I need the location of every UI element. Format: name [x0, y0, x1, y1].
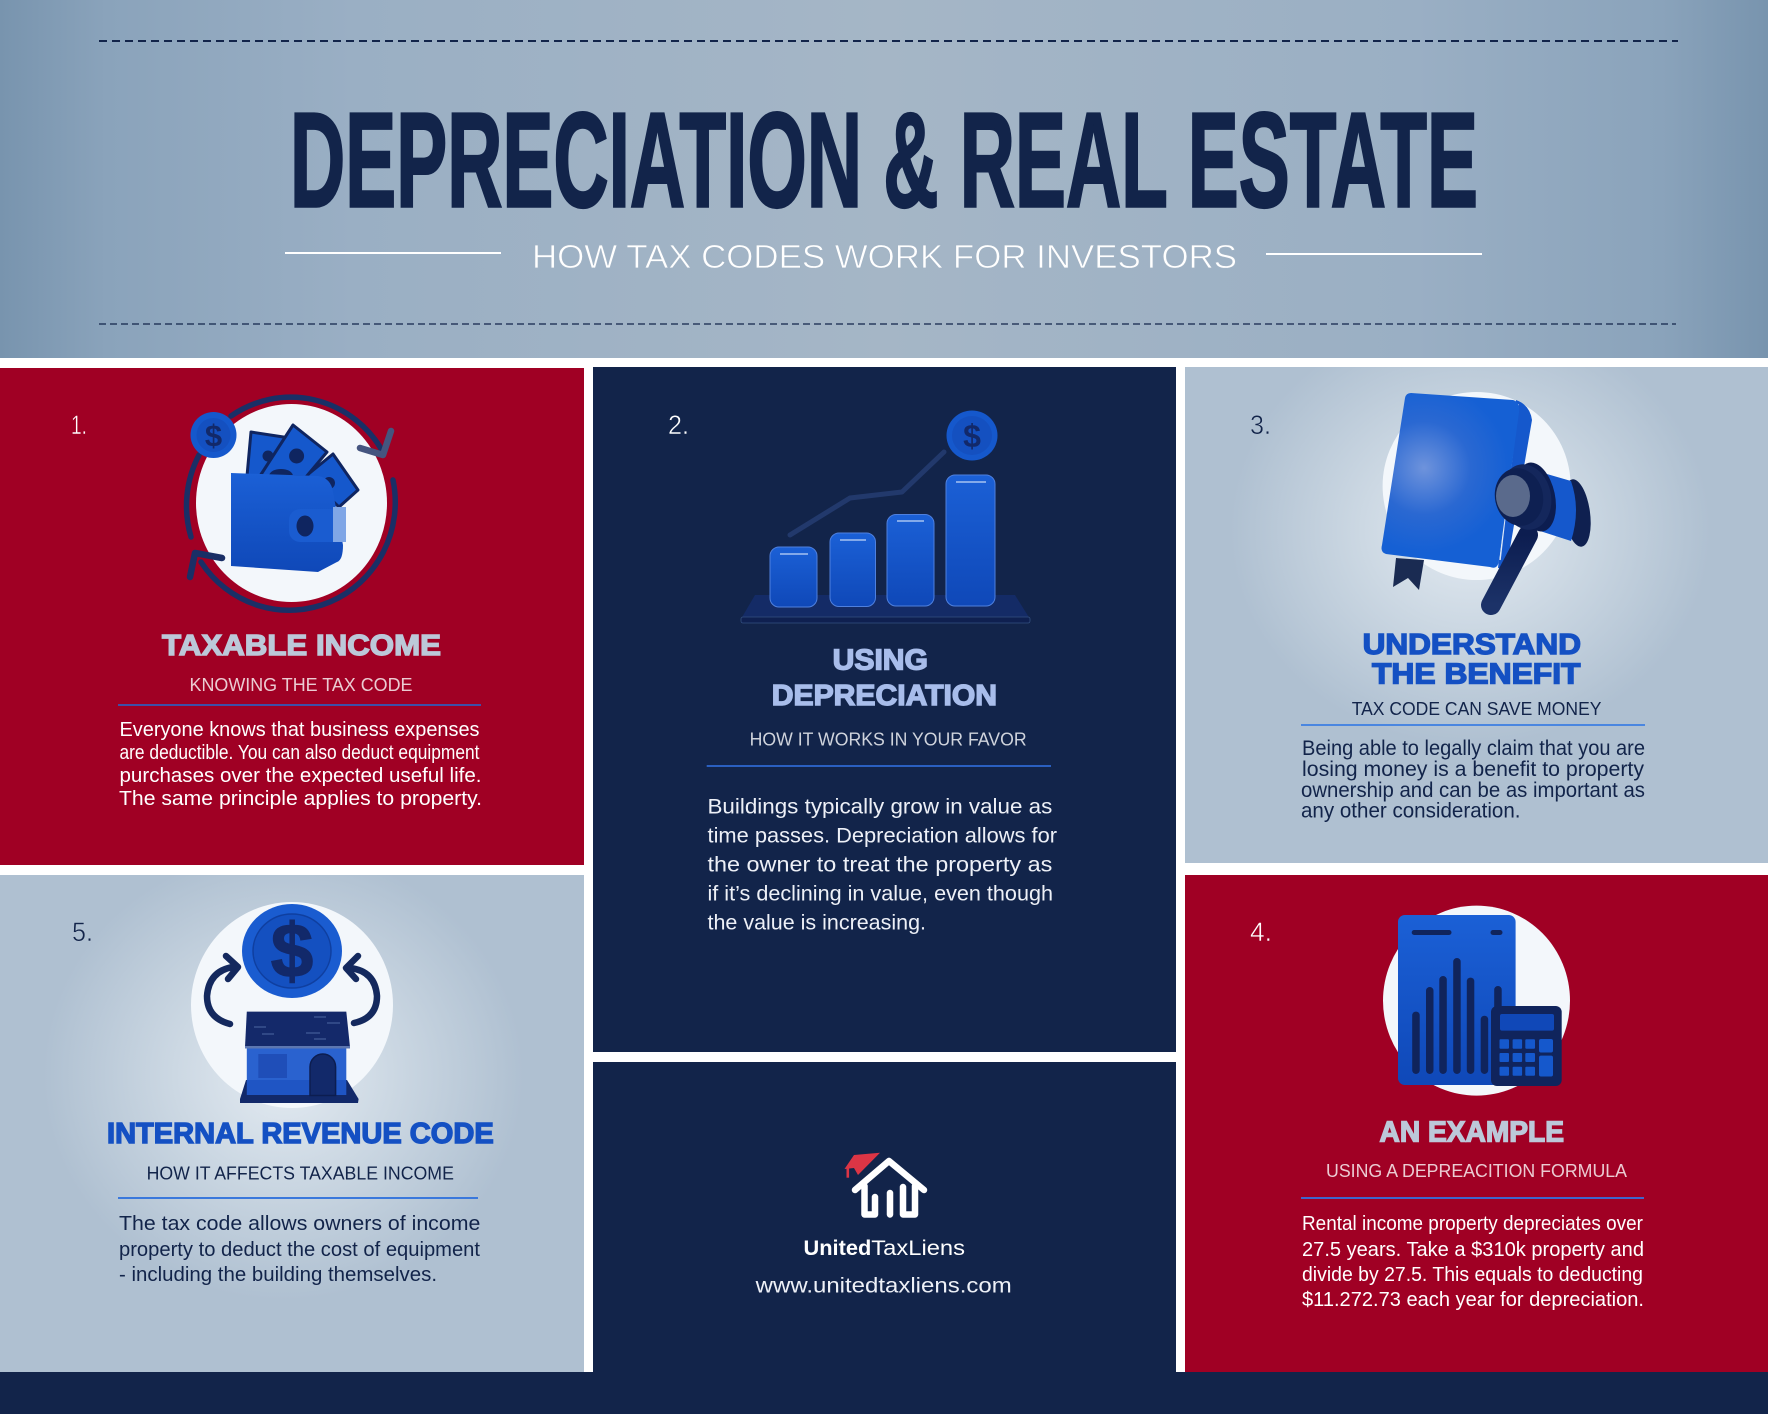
icon: rising bar chart with coin: $: [963, 418, 981, 454]
panel: logo: [593, 1062, 1176, 1372]
body text: if it’s declining in value, even though: [708, 883, 1053, 906]
heading: AN EXAMPLE: [1380, 1117, 1564, 1149]
heading: USING: [833, 644, 928, 676]
brand name: UnitedTaxLiens: [804, 1236, 965, 1260]
body text: property to deduct the cost of equipment: [119, 1238, 480, 1261]
subheading: HOW IT WORKS IN YOUR FAVOR: [750, 728, 1027, 749]
body text: the value is increasing.: [708, 912, 926, 935]
icon: report and calculator: [1383, 906, 1570, 1096]
body text: divide by 27.5. This equals to deducting: [1302, 1263, 1643, 1286]
body text: [708, 796, 1057, 935]
footer bar: [0, 1372, 1768, 1414]
icon: wallet with cash: [187, 397, 395, 610]
panel: 1 taxable income: [0, 368, 584, 865]
website: www.unitedtaxliens.com: [755, 1275, 1012, 1298]
body text: [1301, 737, 1645, 823]
panel: 3 understand the benefit: [1185, 367, 1768, 863]
subheading: KNOWING THE TAX CODE: [190, 674, 412, 695]
number 5: 5.: [72, 917, 93, 947]
body text: Buildings typically grow in value as: [708, 796, 1052, 819]
subheading: HOW IT AFFECTS TAXABLE INCOME: [147, 1162, 454, 1184]
subheading: USING A DEPREACITION FORMULA: [1326, 1160, 1628, 1181]
body text: Everyone knows that business expenses: [120, 718, 480, 741]
icon: coin, arrows and house: $: [271, 909, 313, 994]
body text: are deductible. You can also deduct equipment: [120, 741, 480, 764]
icon: coin, arrows and house: [191, 902, 393, 1108]
body text: - including the building themselves.: [119, 1263, 437, 1286]
subheading: TAX CODE CAN SAVE MONEY: [1352, 698, 1602, 719]
number 3: 3.: [1250, 410, 1271, 440]
body text: $11.272.73 each year for depreciation.: [1302, 1288, 1644, 1311]
body text: The same principle applies to property.: [119, 787, 482, 810]
panel: header: [0, 0, 1768, 358]
number 4: 4.: [1250, 917, 1272, 947]
icon: wallet with cash: $: [205, 418, 222, 453]
number 1: 1.: [71, 410, 87, 440]
heading: INTERNAL REVENUE CODE: [107, 1118, 494, 1150]
body text: the owner to treat the property as: [708, 854, 1052, 877]
body text: [119, 1212, 480, 1286]
body text: [119, 718, 482, 810]
number 2: 2.: [668, 410, 689, 440]
body text: 27.5 years. Take a $310k property and: [1302, 1238, 1644, 1261]
panel: 5 internal revenue code: [0, 875, 584, 1372]
body text: any other consideration.: [1301, 800, 1520, 823]
panel: 2 using depreciation: [593, 367, 1176, 1052]
heading: [772, 644, 997, 712]
subtitle: HOW TAX CODES WORK FOR INVESTORS: [532, 238, 1237, 275]
heading: [1363, 629, 1581, 691]
body text: ownership and can be as important as: [1301, 779, 1645, 802]
body text: [1302, 1212, 1644, 1311]
heading: UNDERSTAND: [1363, 629, 1581, 661]
heading: TAXABLE INCOME: [162, 630, 441, 662]
body text: Rental income property depreciates over: [1302, 1212, 1643, 1235]
body text: Being able to legally claim that you are: [1302, 737, 1645, 760]
body text: purchases over the expected useful life.: [120, 764, 482, 787]
body text: The tax code allows owners of income: [119, 1212, 480, 1235]
heading: DEPRECIATION: [772, 680, 997, 712]
icon: law book and gavel: [1382, 392, 1595, 605]
body text: time passes. Depreciation allows for: [708, 825, 1057, 848]
icon: rising bar chart with coin: [741, 410, 1030, 623]
icon: house logo with graduation cap: [844, 1153, 924, 1214]
heading: THE BENEFIT: [1372, 659, 1581, 691]
panel: 4 an example: [1185, 875, 1768, 1372]
body text: losing money is a benefit to property: [1302, 758, 1645, 781]
